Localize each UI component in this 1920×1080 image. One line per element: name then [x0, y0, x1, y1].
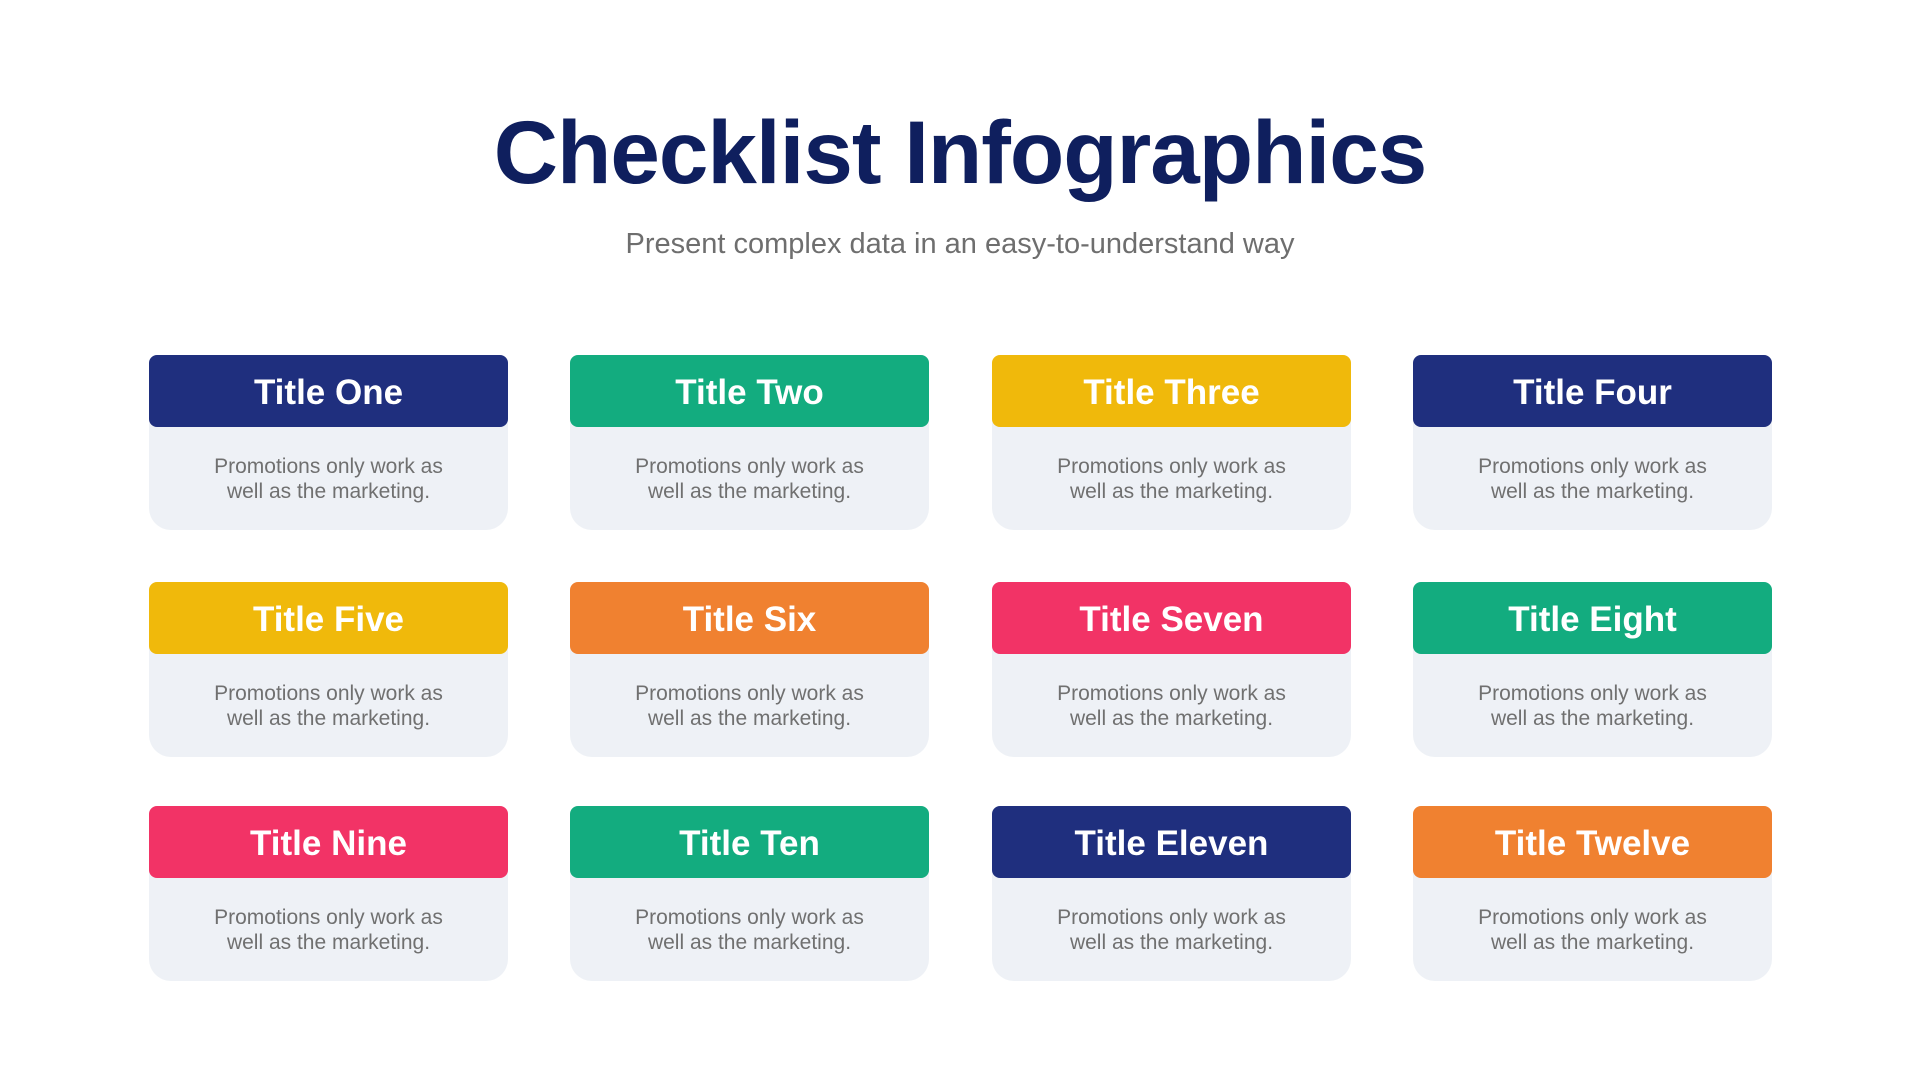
card: three: Title Three: [1083, 373, 1260, 412]
card: nine: Promotions only work as: [214, 906, 443, 929]
card: eight: [1413, 582, 1772, 757]
title: Checklist Infographics: [494, 102, 1426, 202]
card: two: Promotions only work as: [635, 455, 864, 478]
card: four: [1413, 355, 1772, 530]
card: eleven: Promotions only work as: [1057, 906, 1286, 929]
card: five: Promotions only work as: [214, 682, 443, 705]
card: twelve: [1413, 806, 1772, 981]
card: three: well as the marketing.: [1070, 480, 1273, 503]
card: six: Title Six: [683, 600, 816, 639]
card: one: [149, 355, 508, 530]
card: three: Promotions only work as: [1057, 455, 1286, 478]
card: two: Title Two: [675, 373, 824, 412]
card: eleven: Title Eleven: [1075, 824, 1268, 863]
card: one: Title One: [254, 373, 403, 412]
card: twelve: Promotions only work as: [1478, 906, 1707, 929]
card: three: [992, 355, 1351, 530]
card: nine: well as the marketing.: [227, 931, 430, 954]
card: nine: [149, 806, 508, 981]
card: five: [149, 582, 508, 757]
card: six: well as the marketing.: [648, 707, 851, 730]
card: seven: well as the marketing.: [1070, 707, 1273, 730]
card: two: well as the marketing.: [648, 480, 851, 503]
card: five: Title Five: [253, 600, 404, 639]
card: ten: Title Ten: [679, 824, 820, 863]
card: nine: Title Nine: [250, 824, 407, 863]
card: one: well as the marketing.: [227, 480, 430, 503]
card: four: Title Four: [1513, 373, 1672, 412]
card: six: Promotions only work as: [635, 682, 864, 705]
card: seven: [992, 582, 1351, 757]
card: twelve: well as the marketing.: [1491, 931, 1694, 954]
card: eleven: well as the marketing.: [1070, 931, 1273, 954]
card: eleven: [992, 806, 1351, 981]
card: eight: Title Eight: [1508, 600, 1677, 639]
card: eight: well as the marketing.: [1491, 707, 1694, 730]
card: ten: well as the marketing.: [648, 931, 851, 954]
card: twelve: Title Twelve: [1495, 824, 1690, 863]
card: two: [570, 355, 929, 530]
card: four: Promotions only work as: [1478, 455, 1707, 478]
card: one: Promotions only work as: [214, 455, 443, 478]
card: four: well as the marketing.: [1491, 480, 1694, 503]
subtitle: Present complex data in an easy-to-understand way: [626, 228, 1294, 260]
card: seven: Title Seven: [1079, 600, 1264, 639]
card: seven: Promotions only work as: [1057, 682, 1286, 705]
card: six: [570, 582, 929, 757]
card: eight: Promotions only work as: [1478, 682, 1707, 705]
card: ten: [570, 806, 929, 981]
card: ten: Promotions only work as: [635, 906, 864, 929]
card: five: well as the marketing.: [227, 707, 430, 730]
